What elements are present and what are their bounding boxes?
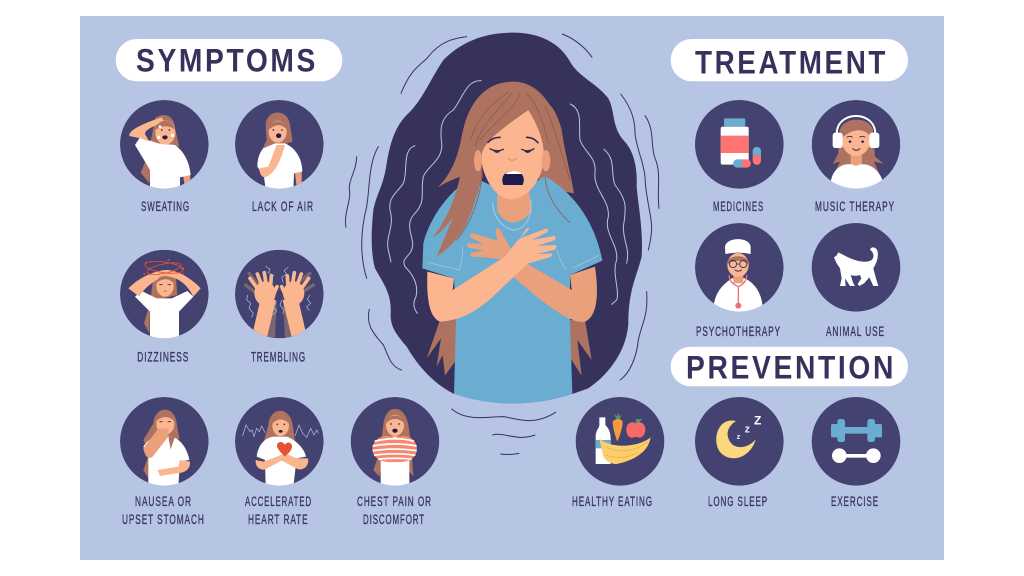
front hair [433, 82, 560, 257]
prevention: healthy eating [572, 397, 664, 509]
blue t-shirt [422, 176, 602, 404]
icon: moon and Z letters: Z [754, 413, 761, 427]
symptom: trembling [235, 250, 324, 364]
left hand [467, 228, 512, 260]
neck [497, 187, 532, 222]
icon: white cat [812, 223, 900, 312]
icon: woman wiping sweat [120, 100, 209, 190]
icon: moon and Z letters [695, 397, 784, 486]
sleeve lines [427, 247, 598, 270]
treatment: music therapy [812, 100, 900, 214]
label: CHEST PAIN OR [357, 494, 432, 509]
icon: woman wrapped with tight bands [351, 397, 439, 487]
nose [508, 158, 517, 160]
icon: doctor with stethoscope [695, 223, 784, 317]
ears [474, 150, 550, 171]
treatment: animal use [812, 223, 900, 339]
icon: woman covering mouth and holding stomach [120, 397, 209, 487]
label: HEART RATE [248, 512, 308, 527]
label: PSYCHOTHERAPY [696, 324, 781, 339]
heading: symptoms: SYMPTOMS [136, 43, 318, 79]
icon: dumbbells [812, 397, 900, 486]
symptom: nausea or upset stomach [120, 397, 209, 527]
icon: shaking hands [235, 250, 324, 338]
label: EXERCISE [831, 494, 879, 509]
heading: treatment: TREATMENT [695, 44, 888, 80]
collar [493, 200, 531, 230]
prevention: exercise [812, 397, 900, 509]
dark swirling blob [372, 33, 642, 394]
treatment: medicines [695, 100, 784, 214]
label: SWEATING [141, 199, 190, 214]
mouth [502, 171, 524, 185]
label: ANIMAL USE [826, 324, 885, 339]
label: TREMBLING [251, 349, 306, 364]
label: UPSET STOMACH [122, 512, 205, 527]
hair strands [457, 92, 570, 240]
label: DISCOMFORT [363, 512, 425, 527]
outer trembling lines [345, 34, 659, 455]
symptom: lack of air [235, 100, 324, 214]
label: NAUSEA OR [135, 494, 192, 509]
central illustration: anxious woman [345, 33, 659, 455]
prevention: long sleep [695, 397, 784, 509]
icon: woman with headphones [812, 100, 900, 190]
label: DIZZINESS [137, 349, 189, 364]
icon: dizzy woman [120, 250, 209, 340]
inner trembling lines [388, 81, 628, 313]
symptom: chest pain or discomfort [351, 397, 439, 527]
icon: bottle, carrot, apple and bananas [576, 397, 664, 486]
symptom: sweating [120, 100, 209, 214]
label [357, 494, 432, 527]
eyebrows and eyes [488, 137, 538, 153]
treatment: psychotherapy [695, 223, 784, 339]
label [245, 494, 312, 527]
label [122, 494, 205, 527]
symptom: accelerated heart rate [235, 397, 324, 527]
heading: prevention: PREVENTION [686, 349, 896, 385]
icon: woman with pounding heart [235, 397, 324, 487]
icon: moon and Z letters: z [737, 432, 741, 441]
icon: woman holding throat [235, 100, 324, 190]
label: LACK OF AIR [252, 199, 314, 214]
icon: pill bottle and capsules [695, 100, 784, 189]
hair behind shoulder [527, 96, 574, 193]
label: HEALTHY EATING [572, 494, 653, 509]
icon: moon and Z letters: z [745, 424, 750, 436]
label: LONG SLEEP [708, 494, 768, 509]
label: ACCELERATED [245, 494, 312, 509]
face [480, 110, 544, 199]
label: MEDICINES [713, 199, 764, 214]
front arm [427, 228, 557, 322]
symptom: dizziness [120, 250, 209, 364]
lower hair [427, 318, 592, 376]
label: MUSIC THERAPY [815, 199, 895, 214]
background panel [80, 16, 944, 560]
back arm [513, 263, 597, 322]
